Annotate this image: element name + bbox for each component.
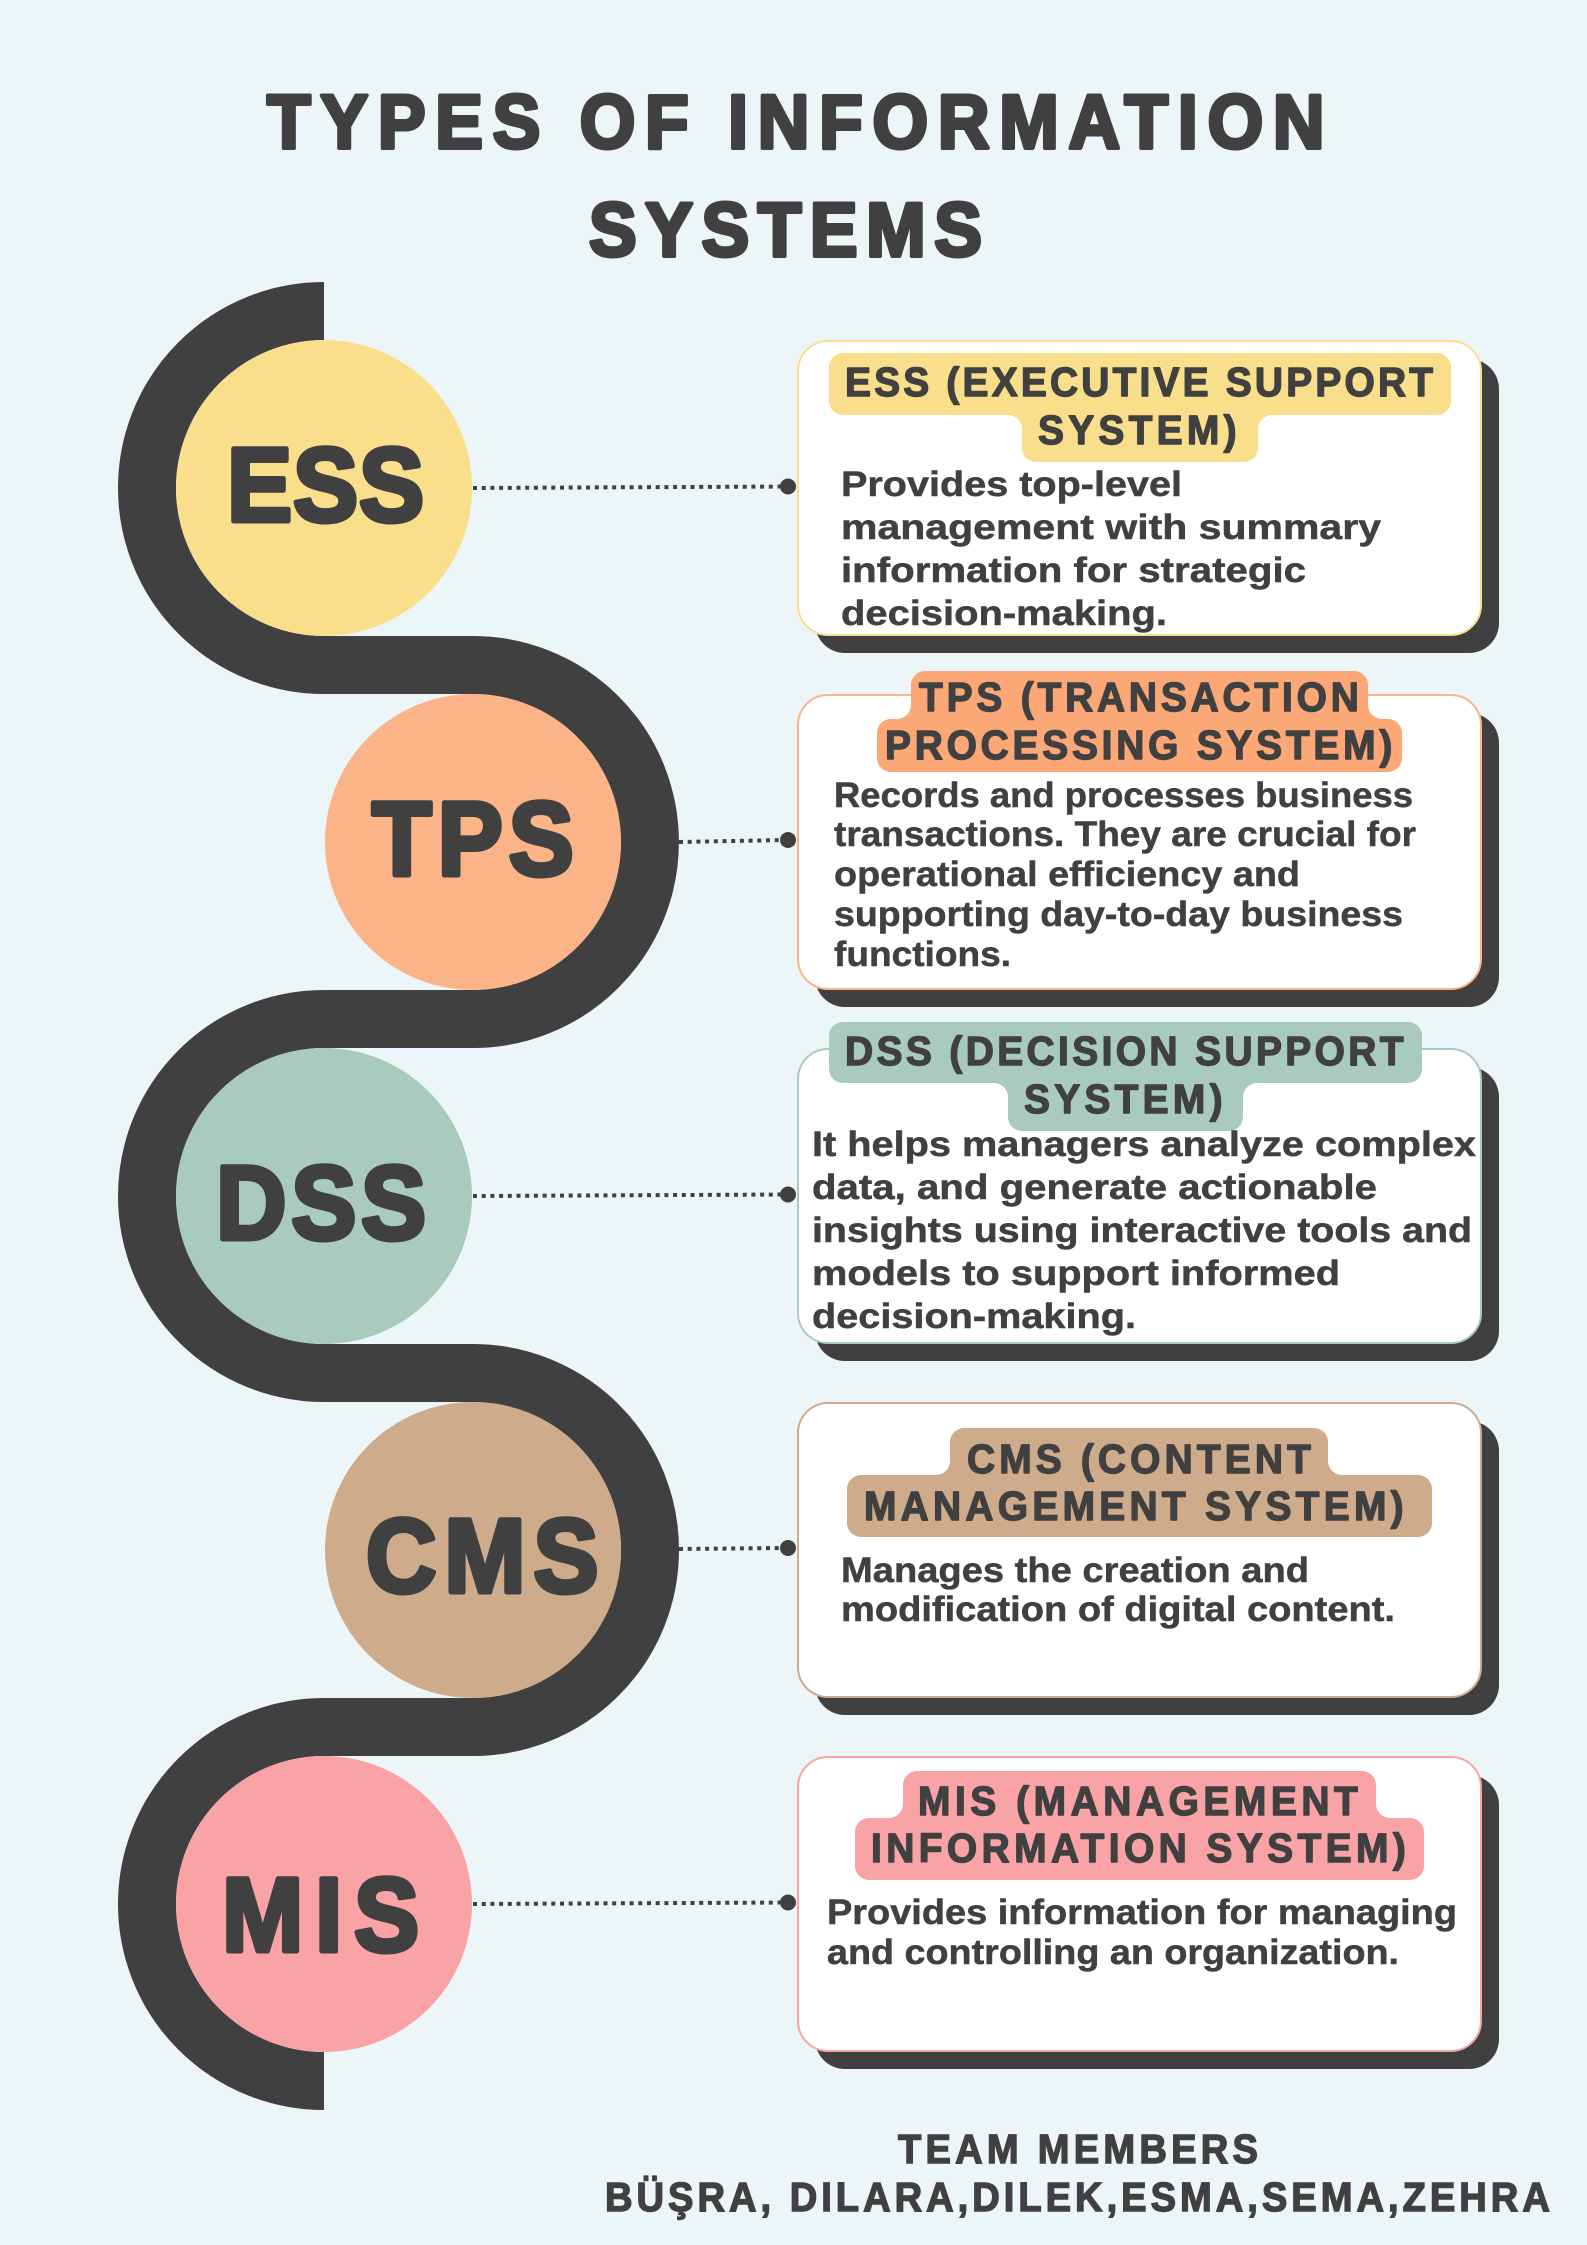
DSS description: insights using interactive tools and bbox=[812, 1211, 1472, 1250]
node: DSS: DSS bbox=[216, 1145, 426, 1262]
node: MIS bbox=[176, 1756, 472, 2052]
team members footer: TEAM MEMBERS bbox=[898, 2127, 1258, 2172]
connector: TPS bbox=[679, 832, 796, 848]
title: TYPES OF INFORMATION bbox=[267, 79, 1324, 164]
ESS heading: SYSTEM) bbox=[1038, 408, 1237, 453]
CMS heading bbox=[847, 1428, 1432, 1537]
ESS description: decision-making. bbox=[841, 594, 1167, 633]
serpentine band bbox=[147, 311, 650, 2081]
node: CMS bbox=[325, 1402, 621, 1698]
connector: DSS bbox=[473, 1186, 796, 1202]
node: TPS: TPS bbox=[372, 781, 574, 898]
team members footer: BÜŞRA, DILARA,DILEK,ESMA,SEMA,ZEHRA bbox=[605, 2175, 1550, 2220]
TPS description: operational efficiency and bbox=[834, 855, 1300, 894]
TPS description: transactions. They are crucial for bbox=[834, 815, 1416, 854]
ESS description: information for strategic bbox=[841, 551, 1306, 590]
TPS heading: PROCESSING SYSTEM) bbox=[885, 723, 1392, 768]
TPS description: Records and processes business bbox=[834, 776, 1413, 815]
node: ESS bbox=[176, 340, 472, 636]
DSS description: models to support informed bbox=[812, 1254, 1340, 1293]
connector: MIS bbox=[473, 1894, 796, 1910]
MIS description bbox=[827, 1893, 1457, 1972]
node: MIS: MIS bbox=[222, 1857, 419, 1974]
connector: CMS bbox=[679, 1540, 796, 1556]
TPS description bbox=[834, 776, 1416, 974]
node: CMS: CMS bbox=[366, 1498, 599, 1615]
TPS heading: TPS (TRANSACTION bbox=[919, 675, 1359, 720]
MIS description: and controlling an organization. bbox=[827, 1933, 1399, 1972]
panel: MIS bbox=[798, 1757, 1499, 2069]
ESS description: Provides top-level bbox=[841, 465, 1182, 504]
DSS description: decision-making. bbox=[812, 1297, 1136, 1336]
node: ESS: ESS bbox=[227, 427, 424, 544]
DSS heading: SYSTEM) bbox=[1024, 1077, 1223, 1122]
DSS description: data, and generate actionable bbox=[812, 1168, 1377, 1207]
TPS heading bbox=[877, 671, 1402, 772]
node: TPS bbox=[325, 694, 621, 990]
ESS description: management with summary bbox=[841, 508, 1382, 547]
CMS heading: CMS (CONTENT bbox=[967, 1437, 1311, 1482]
ESS description bbox=[841, 465, 1382, 633]
CMS description: Manages the creation and bbox=[841, 1551, 1309, 1590]
DSS description: It helps managers analyze complex bbox=[812, 1125, 1477, 1164]
DSS description bbox=[812, 1125, 1477, 1336]
panel: DSS bbox=[798, 1022, 1499, 1361]
title bbox=[267, 79, 1324, 272]
connector: ESS bbox=[473, 478, 796, 494]
ESS heading bbox=[829, 353, 1451, 462]
MIS heading bbox=[855, 1771, 1424, 1880]
TPS description: supporting day-to-day business bbox=[834, 895, 1403, 934]
CMS heading: MANAGEMENT SYSTEM) bbox=[864, 1484, 1404, 1529]
MIS heading: MIS (MANAGEMENT bbox=[918, 1779, 1358, 1824]
MIS description: Provides information for managing bbox=[827, 1893, 1457, 1932]
panel: TPS bbox=[798, 671, 1499, 1007]
title: SYSTEMS bbox=[589, 187, 982, 272]
DSS heading: DSS (DECISION SUPPORT bbox=[845, 1029, 1404, 1074]
team members footer bbox=[605, 2127, 1550, 2220]
MIS heading: INFORMATION SYSTEM) bbox=[871, 1826, 1406, 1871]
CMS description bbox=[841, 1551, 1395, 1629]
DSS heading bbox=[829, 1022, 1422, 1131]
ESS heading: ESS (EXECUTIVE SUPPORT bbox=[845, 360, 1433, 405]
panel: CMS bbox=[798, 1403, 1499, 1715]
node: DSS bbox=[176, 1048, 472, 1344]
TPS description: functions. bbox=[834, 935, 1011, 974]
panel: ESS bbox=[798, 341, 1499, 653]
CMS description: modification of digital content. bbox=[841, 1590, 1395, 1629]
